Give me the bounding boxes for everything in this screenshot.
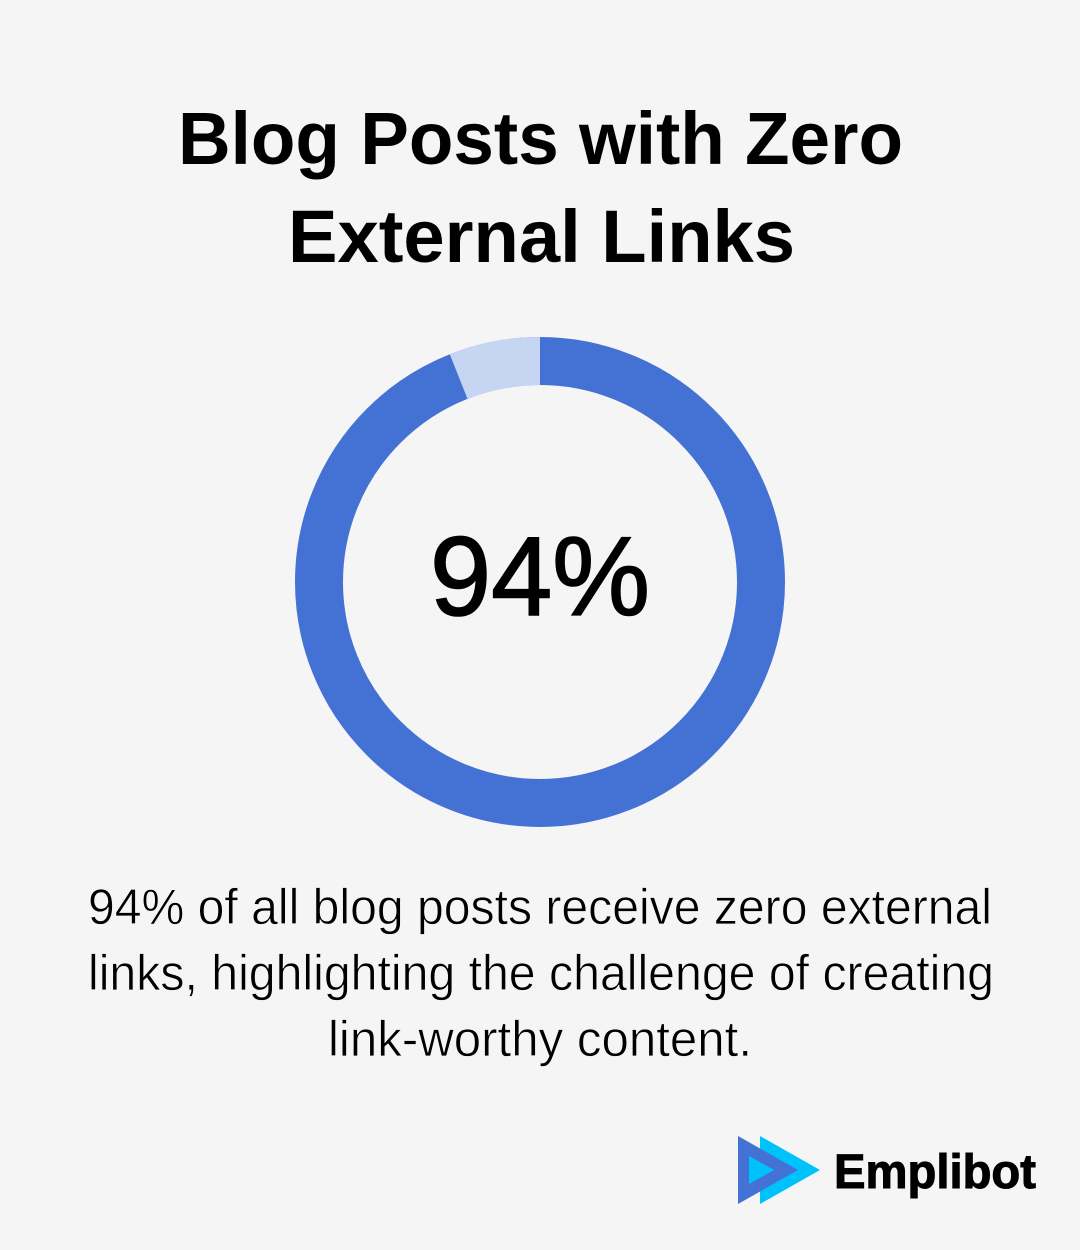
- icon: play triangles: [738, 1136, 820, 1204]
- description text: links, highlighting the challenge of creating: [88, 945, 994, 1001]
- center value: 94%: [430, 514, 650, 639]
- donut chart: 94%: [319, 337, 761, 803]
- title: Blog Posts with Zero: [178, 97, 903, 180]
- description text: [88, 879, 994, 1067]
- description text: 94% of all blog posts receive zero external: [88, 879, 992, 935]
- remaining 6% segment: [450, 337, 540, 399]
- title: External Links: [288, 195, 795, 278]
- title: [178, 97, 903, 278]
- wordmark: Emplibot: [834, 1146, 1036, 1199]
- description text: link-worthy content.: [328, 1011, 752, 1067]
- logo: Emplibot: [738, 1136, 1036, 1204]
